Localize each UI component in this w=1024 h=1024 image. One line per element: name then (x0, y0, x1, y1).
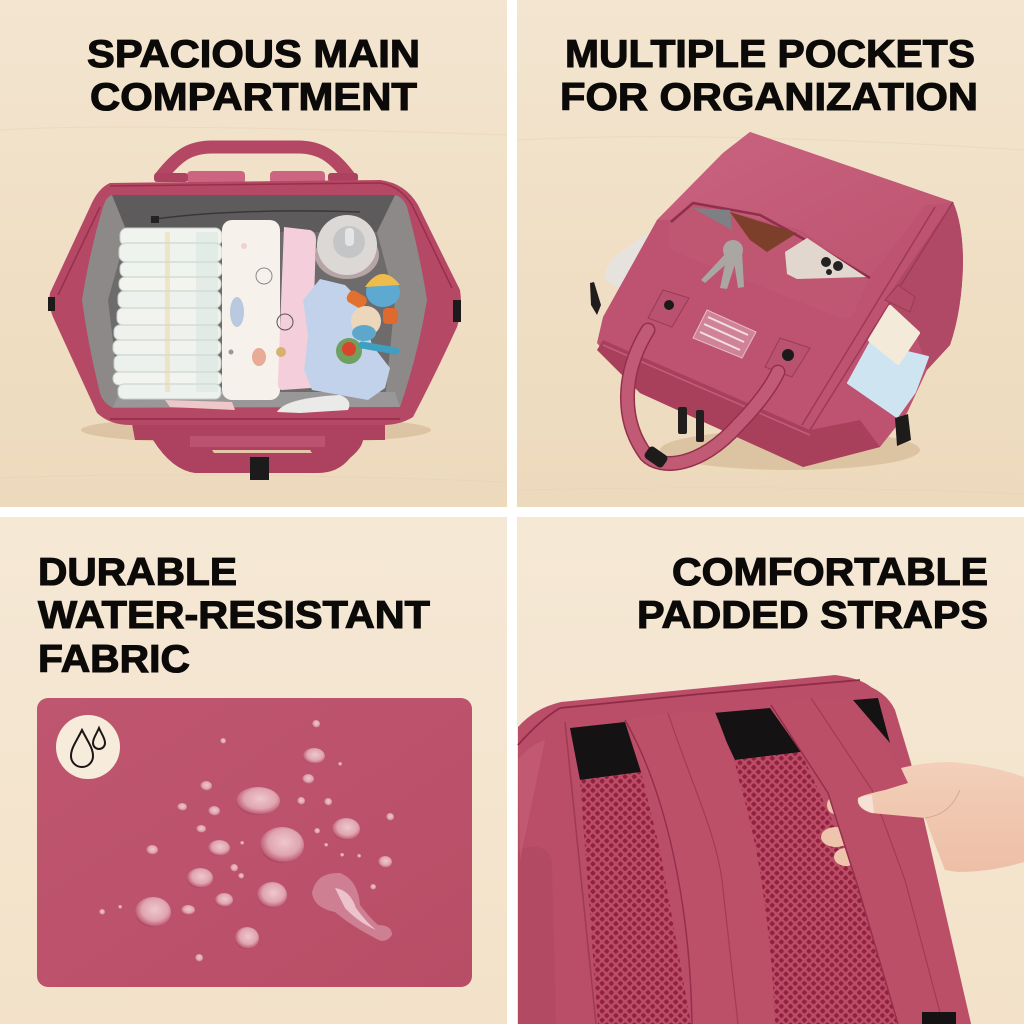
keys (701, 240, 744, 289)
right side panel (885, 202, 963, 370)
heading: multiple pockets (560, 33, 978, 119)
tilted backpack (590, 132, 963, 470)
heading: multiple pockets: FOR ORGANIZATION (560, 76, 978, 119)
lower handle (132, 424, 385, 473)
baby clothes (303, 279, 390, 400)
grey lining (82, 195, 427, 408)
toys (336, 274, 400, 364)
fabric swatch (37, 698, 472, 987)
items in bottom pocket (165, 395, 349, 413)
body rim (49, 180, 461, 425)
panel: durable water-resistant fabric (0, 517, 507, 1024)
wipes and soap (848, 307, 928, 417)
black webbing (570, 698, 890, 780)
heading: multiple pockets: MULTIPLE POCKETS (565, 33, 975, 76)
heading: spacious main compartment: SPACIOUS MAIN (87, 33, 420, 76)
phone (785, 238, 866, 279)
heading: padded straps: COMFORTABLE (672, 551, 988, 594)
water bottle (605, 228, 664, 288)
panel: comfortable padded straps (517, 517, 1024, 1024)
bag body (597, 132, 963, 467)
bottom gusset (597, 340, 880, 467)
front pocket (668, 203, 870, 318)
handle rivet tabs (648, 290, 810, 377)
baby bottle (315, 215, 379, 279)
open bag top view (48, 147, 461, 480)
panel: multiple pockets (517, 0, 1024, 507)
heading: durable fabric: DURABLE (38, 551, 237, 594)
heading: spacious main compartment (87, 33, 420, 119)
heading: durable fabric: FABRIC (38, 638, 190, 681)
zipper pulls (678, 407, 704, 442)
heading: padded straps: PADDED STRAPS (637, 594, 988, 637)
heading: spacious main compartment: COMPARTMENT (90, 76, 417, 119)
heading: durable fabric: WATER-RESISTANT (38, 594, 430, 637)
diapers stack (113, 228, 222, 399)
top panel (657, 132, 953, 277)
pink folded clothes (276, 227, 316, 390)
label patch (693, 310, 756, 358)
heading: durable fabric (38, 551, 430, 681)
panel: spacious main compartment (0, 0, 507, 507)
black strap end (922, 1012, 956, 1024)
hand (858, 762, 1024, 872)
fingers behind strap (821, 796, 858, 866)
rolled blanket (222, 220, 280, 400)
backpack back view (518, 675, 1024, 1024)
carry handle (627, 330, 778, 463)
right shoulder strap (771, 698, 971, 1024)
wallet (730, 212, 797, 252)
water droplets (99, 720, 394, 962)
mesh back panel (580, 752, 898, 1024)
left shoulder strap (625, 712, 775, 1024)
top handle (160, 147, 350, 178)
heading: padded straps (637, 551, 988, 637)
icon: water drops (56, 715, 120, 779)
